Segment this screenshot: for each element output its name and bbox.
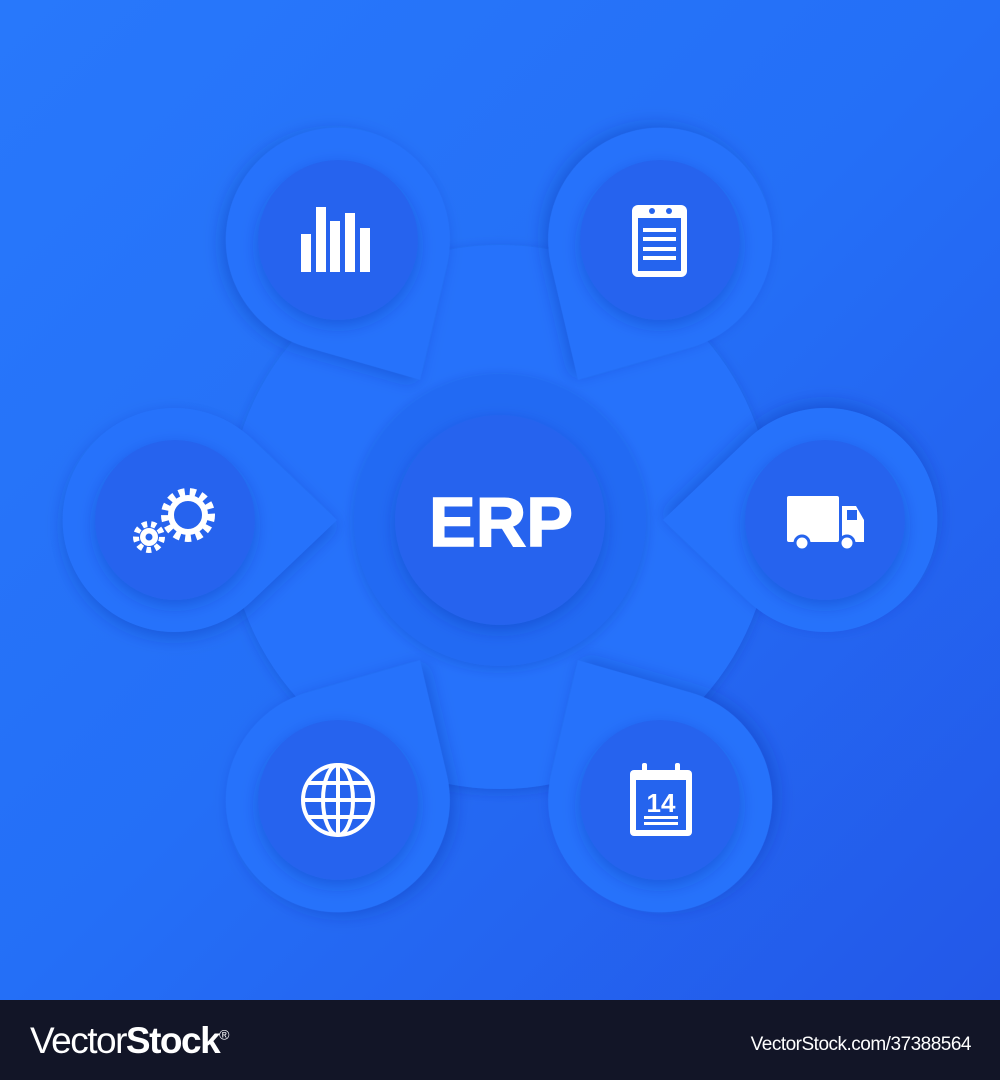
center ring	[354, 374, 646, 666]
drop: globe	[185, 604, 517, 954]
drop: calendar	[481, 604, 813, 954]
icon: gears	[136, 492, 211, 550]
center circle	[395, 415, 605, 625]
icon: truck	[787, 496, 864, 550]
footer logo: VectorStock®	[30, 1020, 228, 1061]
icon: calendar: 14	[647, 788, 676, 818]
title: ERP: ERP	[429, 483, 573, 561]
drop: notepad	[481, 86, 813, 436]
background circle	[228, 245, 772, 789]
footer url: VectorStock.com/37388564	[751, 1034, 971, 1055]
icon: calendar	[630, 763, 692, 836]
drop: chart	[185, 86, 517, 436]
drop: truck	[663, 408, 937, 632]
footer	[0, 1000, 1000, 1080]
icon: notepad	[632, 205, 687, 277]
icon: bar chart	[301, 207, 370, 272]
icon: globe	[303, 765, 373, 835]
drop: gears	[63, 408, 337, 632]
